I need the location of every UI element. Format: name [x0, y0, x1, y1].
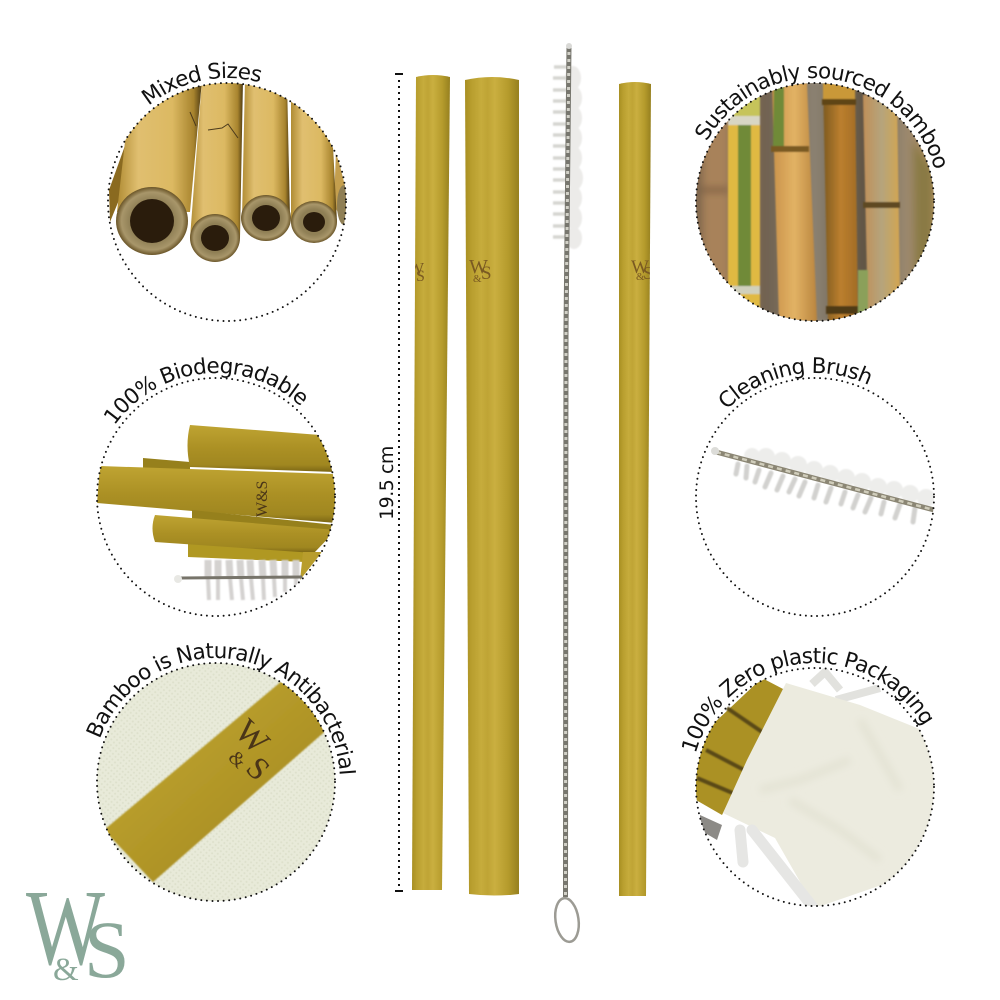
straw 2 [465, 77, 519, 896]
panel: 100% Biodegradable [96, 357, 336, 617]
straw 3: S [643, 263, 653, 283]
photo: bamboo tube ends [109, 80, 351, 262]
branded mark on straw: & [224, 746, 251, 773]
photo: bamboo stalks [690, 77, 940, 327]
panel: 100% Zero plastic Packaging [682, 647, 935, 907]
photo: brush close-up [711, 447, 935, 522]
panel: Mixed Sizes [107, 62, 347, 322]
photo: straws and brush [97, 425, 336, 600]
dotted ring [696, 83, 934, 321]
panel: Cleaning Brush [695, 357, 935, 617]
logo: W&S: S [84, 904, 130, 995]
heading: Cleaning Brush: Cleaning Brush [720, 357, 871, 406]
straw 2: W [469, 256, 488, 278]
heading: 100% Zero plastic Packaging: 100% Zero plastic Packaging [682, 647, 932, 752]
heading: 100% Biodegradable: 100% Biodegradable [104, 357, 306, 424]
straw 1: S [416, 268, 425, 285]
dotted ring [97, 378, 335, 616]
straw 3 [619, 82, 653, 896]
logo: W&S: W [26, 869, 105, 988]
straw 2: & [473, 273, 482, 285]
straw 3: & [636, 271, 645, 283]
branded mark on straw [229, 717, 272, 779]
heading: Bamboo is Naturally Antibacterial: Bamboo is Naturally Antibacterial [86, 643, 356, 774]
dotted ring [97, 663, 335, 901]
dotted ring [696, 668, 934, 906]
dotted ring [108, 83, 346, 321]
dimension: 19.5 cm [376, 74, 403, 891]
panel: Sustainably sourced bamboo [695, 65, 945, 322]
heading: Sustainably sourced bamboo: Sustainably sourced bamboo [696, 65, 945, 168]
photo: cotton bag [696, 672, 940, 908]
branded mark on straw: S [239, 749, 277, 787]
straw 2: S [481, 263, 492, 284]
dimension: 19.5 cm: 19.5 cm [376, 446, 398, 520]
heading: Mixed Sizes: Mixed Sizes [141, 62, 262, 104]
straw 1: W [408, 259, 425, 278]
logo: W&S: & [53, 952, 79, 988]
photo: straw on linen [97, 663, 335, 901]
panel: Bamboo is Naturally Antibacterial [86, 643, 356, 902]
dotted ring [696, 378, 934, 616]
straw 3: W [631, 257, 649, 278]
straw 1 [408, 75, 450, 890]
branded mark on straw: W [227, 713, 277, 762]
branded mark on straw: W&S [254, 481, 271, 517]
brush with twisted wire and loop [553, 43, 583, 943]
